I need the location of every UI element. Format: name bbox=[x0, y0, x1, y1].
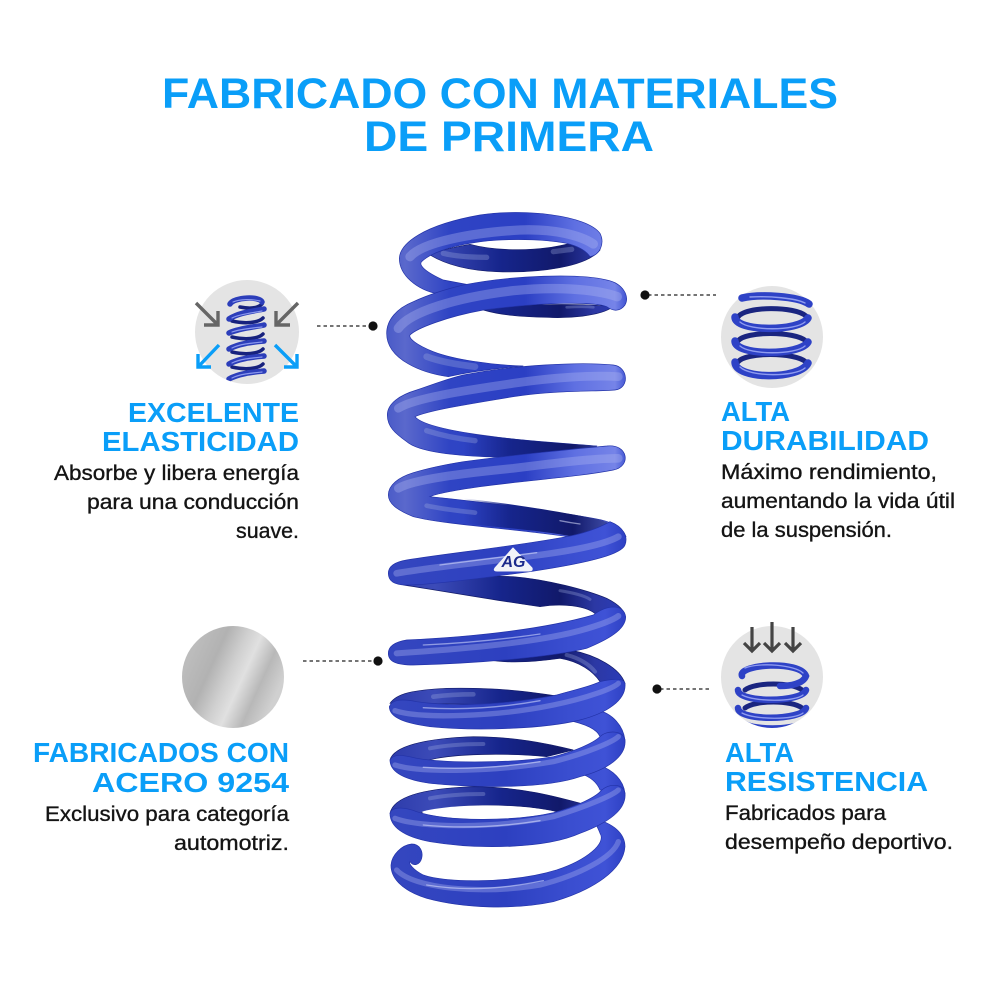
text: resistencia description bbox=[725, 802, 953, 854]
text: elasticidad description: Absorbe y libera energía bbox=[54, 462, 299, 485]
front coil 9 bbox=[390, 785, 625, 847]
text: elasticidad description: para una conducción bbox=[87, 491, 299, 514]
heading: excelente elasticidad bbox=[102, 397, 299, 457]
AG logo badge: AG bbox=[500, 554, 526, 571]
title bbox=[162, 70, 838, 161]
text: elasticidad description: suave. bbox=[236, 520, 299, 543]
icon arrows: load bbox=[744, 622, 801, 651]
front coil 7 bbox=[389, 679, 625, 729]
front coil 8 bbox=[390, 732, 625, 787]
title: FABRICADO CON MATERIALES bbox=[162, 70, 838, 118]
heading: fabricados con acero: FABRICADOS CON bbox=[33, 737, 289, 768]
AG logo badge bbox=[494, 548, 532, 571]
icon: durability spring bbox=[721, 286, 823, 388]
text: acero description: automotriz. bbox=[174, 832, 289, 855]
heading: fabricados con acero: ACERO 9254 bbox=[92, 767, 290, 798]
text: durabilidad description: aumentando la vida útil bbox=[721, 490, 955, 513]
text: durabilidad description: de la suspensión. bbox=[721, 519, 892, 542]
front coil 4 bbox=[388, 446, 626, 538]
heading: alta durabilidad: DURABILIDAD bbox=[721, 425, 929, 456]
front coil 6 bbox=[388, 607, 626, 665]
text: durabilidad description bbox=[721, 461, 955, 542]
heading: alta resistencia: RESISTENCIA bbox=[725, 766, 928, 797]
heading: alta durabilidad: ALTA bbox=[721, 396, 790, 427]
front coil 2 bbox=[387, 276, 627, 377]
heading: fabricados con acero bbox=[33, 737, 290, 798]
leader line: elasticidad bbox=[317, 321, 378, 331]
heading: alta durabilidad bbox=[721, 396, 929, 456]
leader line: acero bbox=[303, 656, 383, 666]
heading: excelente elasticidad: ELASTICIDAD bbox=[102, 426, 299, 457]
text: elasticidad description bbox=[54, 462, 299, 543]
front coil 3 bbox=[387, 364, 625, 457]
front coil 5 bbox=[388, 522, 626, 617]
rear spring sections bbox=[390, 243, 625, 820]
heading: alta resistencia: ALTA bbox=[725, 737, 794, 768]
front coil 10 with end hook bbox=[391, 818, 625, 907]
icon: steel sample disc bbox=[182, 626, 284, 728]
icon arrows: grey compression bbox=[196, 303, 298, 325]
front coil 1 bbox=[399, 212, 602, 294]
icon arrows: blue extension bbox=[198, 345, 297, 367]
text: durabilidad description: Máximo rendimiento, bbox=[721, 461, 937, 484]
heading: excelente elasticidad: EXCELENTE bbox=[128, 397, 299, 428]
text: resistencia description: desempeño deportivo. bbox=[725, 831, 953, 854]
heading: alta resistencia bbox=[725, 737, 928, 797]
text: acero description bbox=[45, 803, 289, 855]
text: acero description: Exclusivo para categoría bbox=[45, 803, 289, 826]
main coil spring illustration bbox=[387, 212, 627, 907]
icon: elasticity spring with arrows bbox=[195, 280, 299, 384]
text: resistencia description: Fabricados para bbox=[725, 802, 886, 825]
leader line: durabilidad bbox=[640, 290, 716, 300]
leader line: resistencia bbox=[652, 684, 709, 694]
icon: resistance spring with load arrows bbox=[721, 622, 823, 728]
title: DE PRIMERA bbox=[364, 113, 654, 161]
